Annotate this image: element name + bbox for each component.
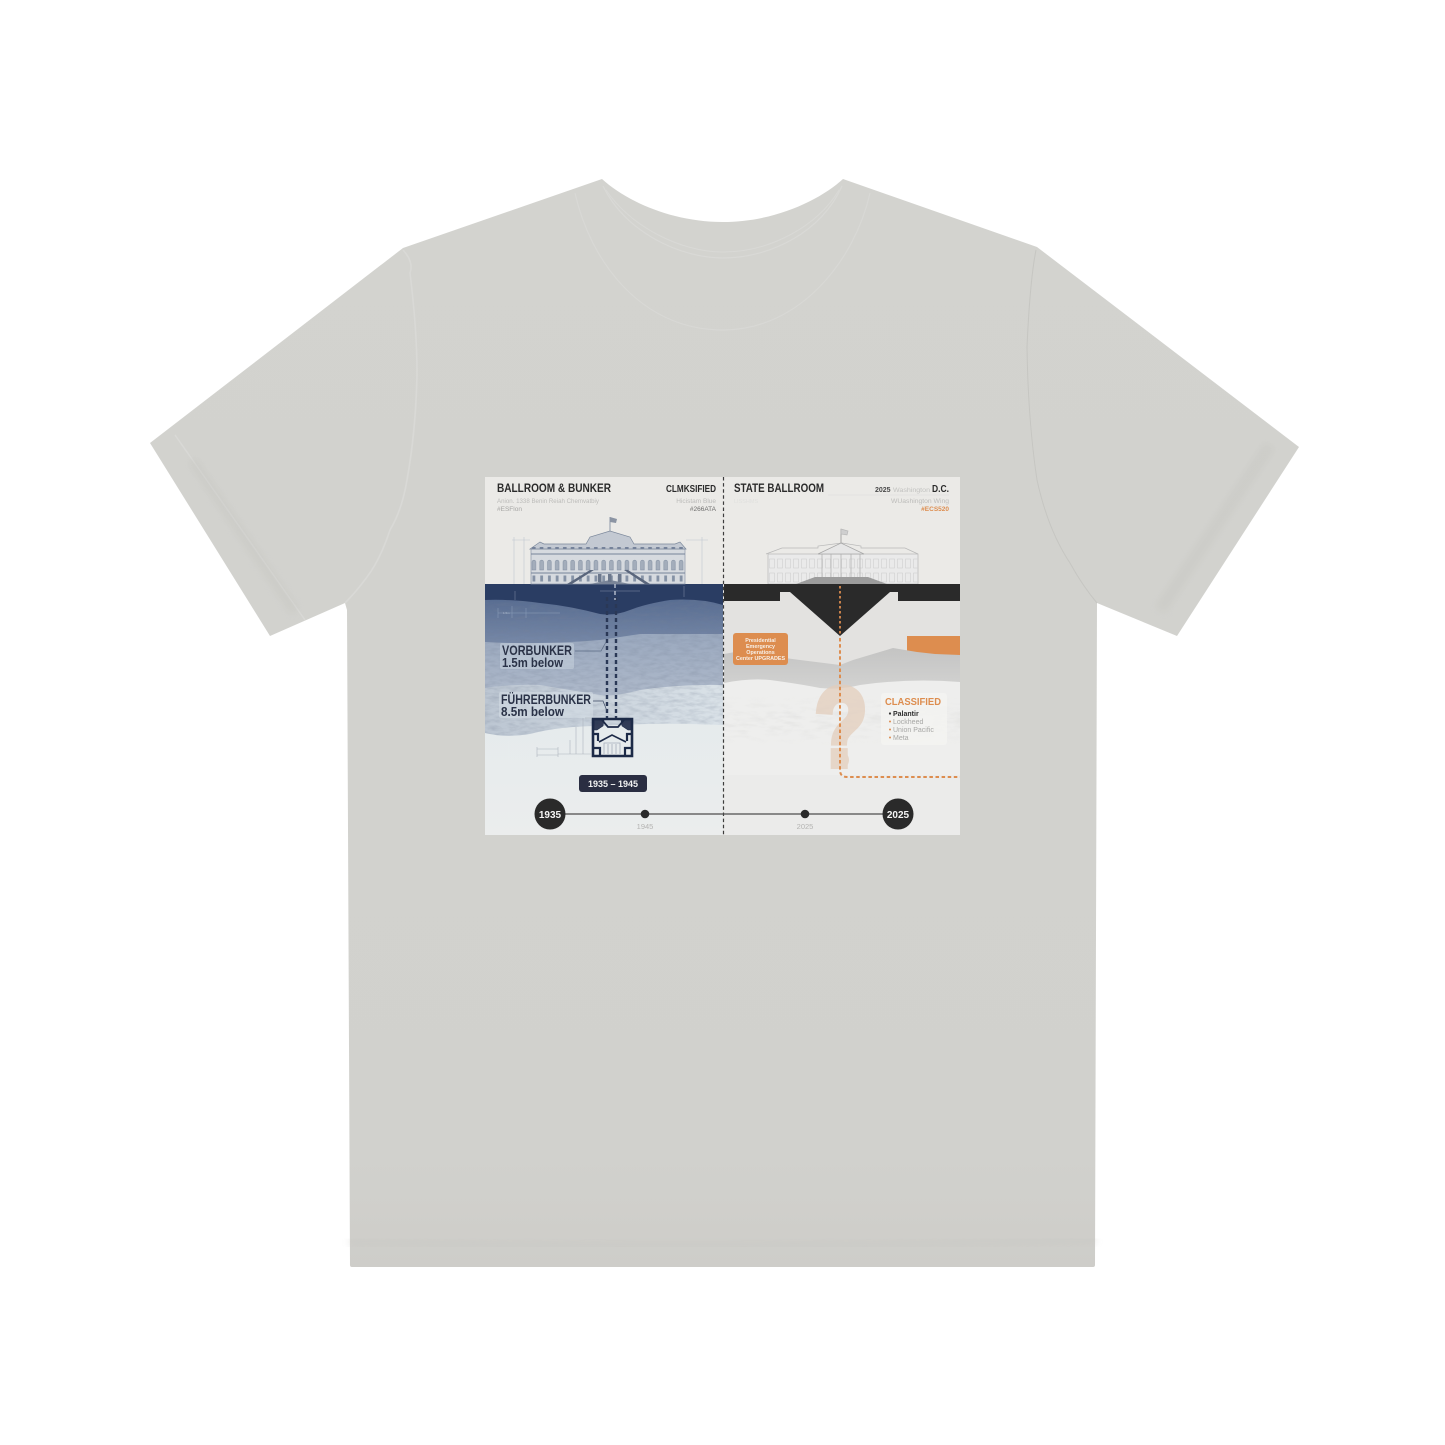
timeline: 2025 [887, 810, 910, 821]
header: left title: Anion. 1338 Benin Reiah Chemvatbiy [497, 498, 600, 505]
header: left title: CLMKSIFIED [666, 483, 716, 495]
timeline: 1935 [539, 810, 562, 821]
double dashed shaft [607, 584, 616, 720]
header: left title [497, 481, 717, 513]
illustration: right White House elevation [766, 529, 918, 584]
technical dimension drawing [537, 718, 592, 757]
classified list: Union Pacific [893, 727, 934, 734]
question mark icon: ? [814, 666, 868, 791]
panel: right strata cross-section [724, 636, 960, 688]
classified list: Lockheed [893, 719, 923, 726]
printed infographic [485, 477, 960, 835]
label: Fuhrerbunker [499, 692, 593, 719]
orange callout: Presidential Emergency Operations Center: Presidential [745, 638, 776, 644]
header: left title: #266ATA [690, 506, 717, 513]
panel: print background [485, 477, 960, 835]
illustration: left palace elevation [512, 517, 708, 584]
classified list: CLASSIFIED [885, 696, 941, 708]
header: right title: D.C. [932, 484, 949, 495]
header: right title: WUashington Wing [891, 498, 949, 505]
timeline [534, 798, 914, 831]
orange block [907, 636, 960, 655]
header: right title: STATE BALLROOM [734, 481, 824, 495]
label: Fuhrerbunker: 8.5m below [501, 704, 565, 719]
header: left title: Hicistam Blue [676, 498, 716, 505]
date pill [579, 775, 647, 792]
classified list: Palantir [893, 711, 919, 718]
label: Fuhrerbunker: FÜHRERBUNKER [501, 692, 591, 707]
header: right title: Washington [893, 487, 930, 494]
label: Vorbunker: VORBUNKER [502, 642, 572, 658]
header: right title: 2025 [875, 487, 891, 494]
header: left title: #ESFlon [497, 506, 522, 513]
orange callout: Presidential Emergency Operations Center [733, 633, 788, 665]
date pill: 1935 – 1945 [588, 779, 638, 789]
label: Vorbunker [500, 642, 574, 670]
t-shirt [150, 179, 1299, 1267]
timeline: 1945 [637, 822, 653, 831]
navy ground dimension marks: 1.5m [503, 611, 510, 615]
header: right title: #ECS520 [921, 506, 949, 513]
classified list: Meta [893, 735, 909, 742]
panel: left strata cross-section [485, 584, 723, 736]
header: right title: LISSHMS [734, 499, 758, 505]
orange dashed route [840, 586, 960, 777]
orange callout: Presidential Emergency Operations Center: Center UPGRADES [736, 656, 785, 662]
orange callout: Presidential Emergency Operations Center: Operations [746, 650, 775, 656]
bunker floor plan icon [593, 719, 632, 756]
leader lines [575, 642, 607, 711]
navy ground dimension marks [498, 586, 684, 618]
center dashed divider [722, 477, 724, 835]
header: left title: BALLROOM & BUNKER [497, 481, 611, 495]
timeline: 2025 [797, 822, 813, 831]
right black foundation and V-shaped vault [724, 584, 960, 636]
orange callout: Presidential Emergency Operations Center: Emergency [746, 644, 775, 650]
label: Vorbunker: 1.5m below [502, 655, 564, 670]
classified list [881, 693, 947, 745]
header: right title [734, 481, 949, 513]
